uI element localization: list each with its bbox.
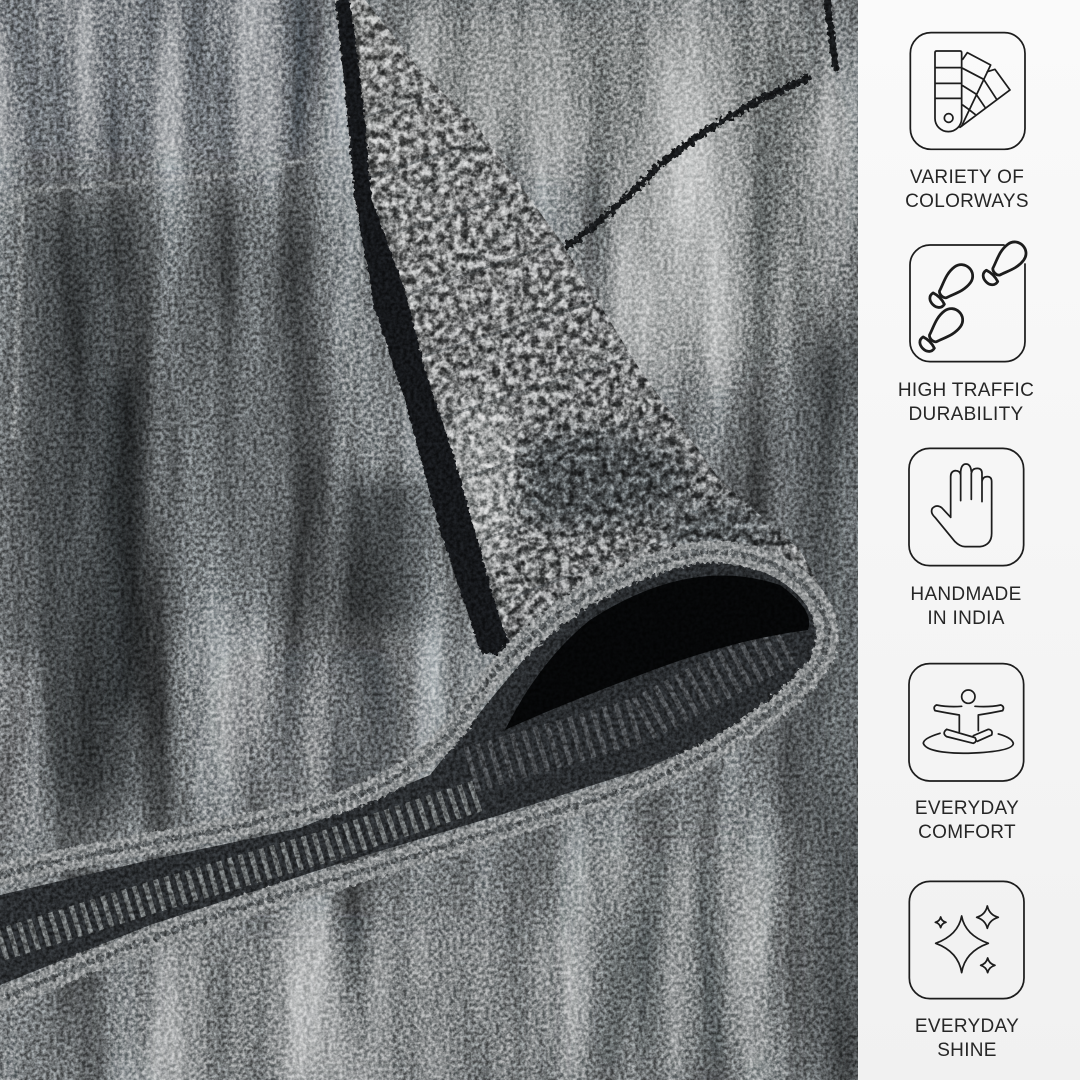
vertical streak texture bbox=[0, 0, 858, 1080]
rope binding bbox=[0, 552, 827, 1000]
icon: hand bbox=[909, 448, 1024, 566]
feature: everyday shine: SHINE bbox=[937, 1040, 997, 1061]
feature: variety of colorways: COLORWAYS bbox=[905, 191, 1029, 212]
feature: everyday shine bbox=[909, 881, 1024, 1061]
label: HANDMADE bbox=[910, 584, 1022, 605]
panel: white feature column bbox=[858, 0, 1080, 1080]
dark opening of the roll bbox=[505, 576, 809, 730]
icon: meditating figure bbox=[909, 664, 1024, 781]
feature: variety of colorways bbox=[905, 33, 1029, 212]
rolled edge of the rug bbox=[330, 0, 840, 680]
icon: sparkles bbox=[909, 881, 1024, 999]
feature: everyday comfort: COMFORT bbox=[918, 822, 1016, 843]
feature: everyday comfort bbox=[909, 664, 1024, 843]
label: VARIETY OF bbox=[910, 167, 1024, 188]
feature: handmade in india bbox=[909, 448, 1024, 629]
feature: handmade in india: IN INDIA bbox=[927, 608, 1005, 629]
feature: high traffic durability bbox=[898, 237, 1034, 425]
dark line on the flat rug, top right bbox=[553, 0, 836, 256]
label: EVERYDAY bbox=[915, 798, 1019, 819]
icon: colour swatch fan bbox=[910, 33, 1025, 149]
label: EVERYDAY bbox=[915, 1016, 1019, 1037]
underside strip bbox=[0, 558, 825, 985]
fine pile grain bbox=[0, 0, 858, 1080]
feature: high traffic durability: DURABILITY bbox=[909, 404, 1023, 425]
faint light seam lines bbox=[0, 150, 345, 800]
dark line along the roll bbox=[335, 0, 515, 655]
icon: footprints bbox=[910, 237, 1031, 362]
label: HIGH TRAFFIC bbox=[898, 380, 1034, 401]
